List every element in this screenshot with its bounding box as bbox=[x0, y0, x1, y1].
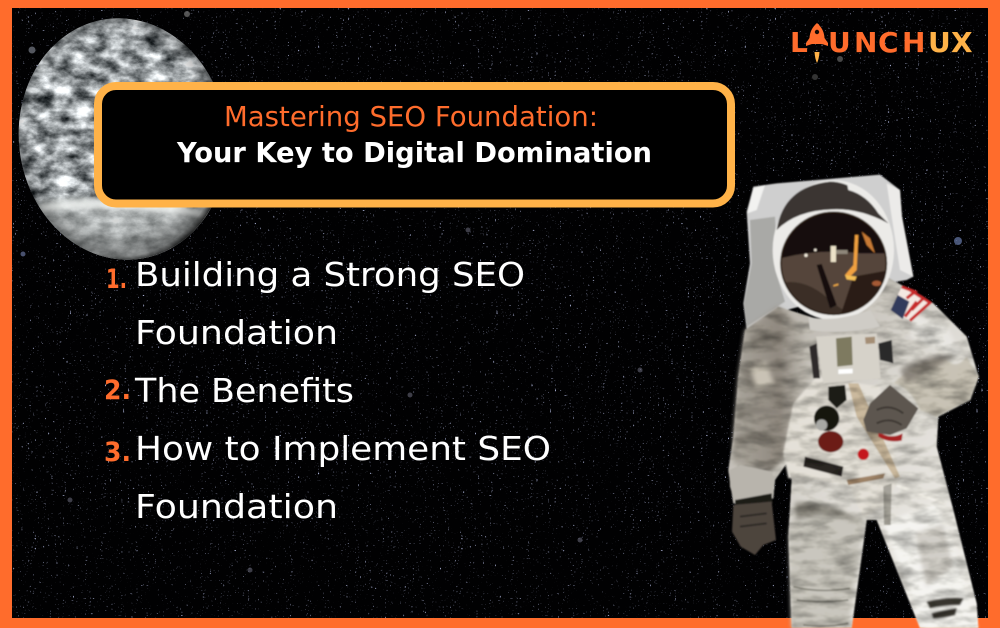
item 1 number: 1. bbox=[106, 264, 127, 295]
item 2 number: 2. bbox=[104, 375, 131, 406]
icon: american flag patch bbox=[891, 287, 932, 322]
planet earth bbox=[18, 18, 213, 260]
title line 1: Mastering SEO Foundation: bbox=[224, 100, 598, 133]
logo letter L: L bbox=[790, 26, 808, 59]
logo letters UNCH: UNCH bbox=[828, 26, 925, 59]
suit controls bbox=[814, 406, 839, 431]
suit centre bbox=[783, 377, 900, 518]
title line 2: Your Key to Digital Domination bbox=[176, 136, 652, 169]
icon: rocket bbox=[806, 23, 828, 63]
visor reflection bbox=[780, 212, 886, 314]
item 3 text continued: Foundation bbox=[135, 487, 338, 526]
left wrist cuff bbox=[729, 465, 775, 503]
suit shading: right arm bbox=[893, 357, 979, 417]
helmet bbox=[773, 180, 894, 320]
suit shading: left arm bbox=[733, 307, 810, 472]
item 3 number: 3. bbox=[104, 437, 131, 468]
chest control unit bbox=[816, 333, 881, 383]
suit mottling bbox=[727, 277, 983, 628]
astronaut bbox=[727, 175, 983, 628]
right glove bbox=[863, 385, 918, 435]
logo: LaunchUX bbox=[790, 23, 973, 63]
item 2 text: The Benefits bbox=[134, 371, 354, 410]
suit body bbox=[728, 277, 979, 628]
backpack bbox=[743, 175, 913, 330]
item 1 text: Building a Strong SEO bbox=[135, 255, 525, 294]
title box bbox=[98, 86, 731, 204]
logo letters UX: UX bbox=[928, 26, 973, 59]
item 3 text: How to Implement SEO bbox=[135, 429, 551, 468]
numbered list bbox=[104, 255, 551, 526]
left glove bbox=[732, 502, 776, 555]
item 1 text continued: Foundation bbox=[135, 313, 338, 352]
suit shading: legs bbox=[789, 500, 863, 628]
